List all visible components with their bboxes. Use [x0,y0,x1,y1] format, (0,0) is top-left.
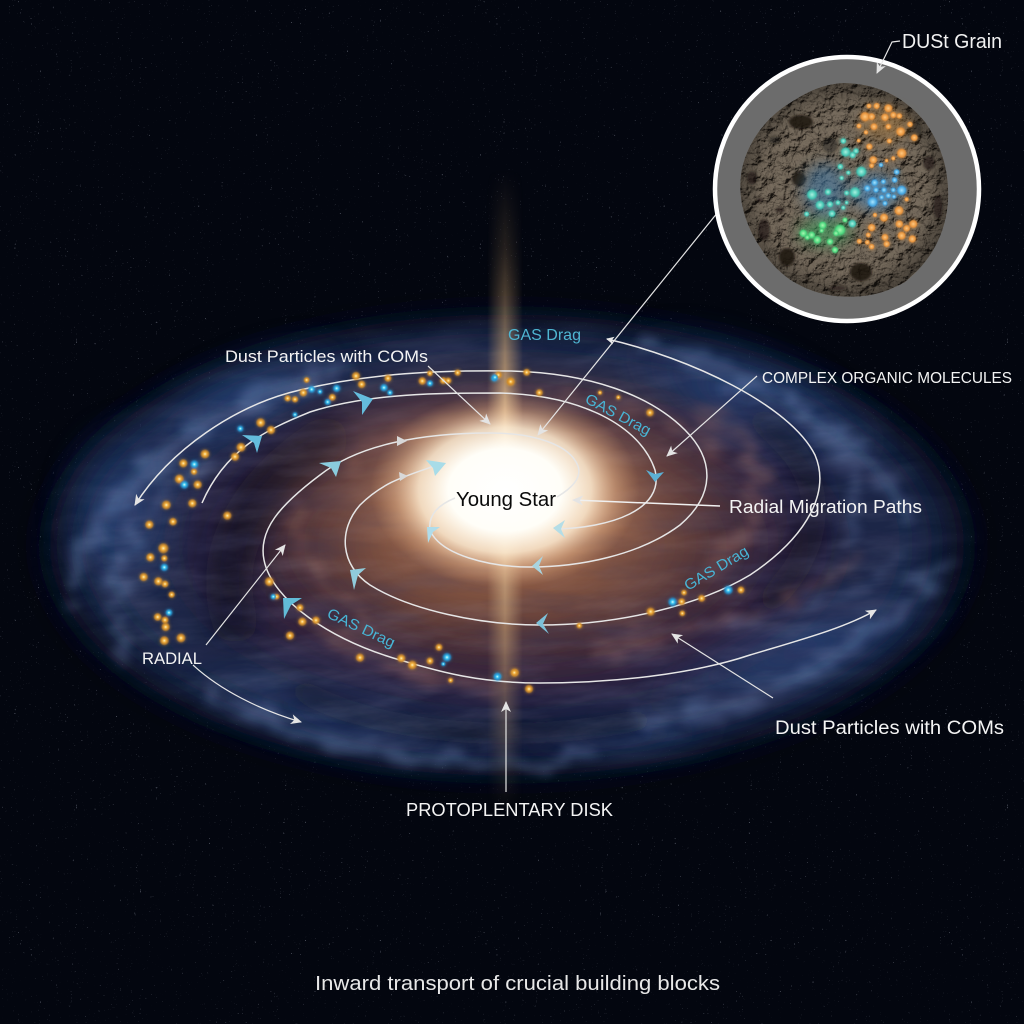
label: gas drag lower right: GAS Drag [681,543,752,594]
pointer arrow: radial [206,545,285,645]
young star core [370,392,640,588]
blue outer arm clouds [50,282,976,800]
craters [747,115,943,291]
pointer arrow: dust particles top [428,366,490,424]
pointer arrow: dust particles bottom [672,634,773,698]
spiral two [345,339,820,625]
label: protoplanetary disk: PROTOPLENTARY DISK [406,800,613,820]
label: radial migration paths: Radial Migration Paths [729,497,922,517]
orange upper cluster [856,103,918,168]
label: dust particles bottom: Dust Particles with COMs [775,718,1004,739]
label: complex organic molecules: COMPLEX ORGANIC MOLECULES [762,370,1012,387]
small flow heads [397,436,407,446]
pointer arrow: complex organic molecules [667,376,757,456]
vertical light jet [488,191,522,796]
caption: Inward transport of crucial building blocks [315,973,720,995]
blue particles [491,374,733,681]
orange particles [495,368,745,694]
orange particles [139,369,519,683]
pointer arrow: protoplanetary disk [505,702,507,792]
rocky dust grain [735,78,955,303]
white spiral migration paths [135,339,876,722]
green cluster [799,217,848,253]
label: dust grain: DUSt Grain [902,31,1002,53]
protoplanetary disk [34,302,980,790]
dust particles with COMs: left and top group [139,369,519,683]
label: gas drag upper right: GAS Drag [582,391,654,439]
stellar glow [240,345,770,645]
orange lower cluster [857,197,918,250]
cyan flow arrowheads [242,391,664,634]
inset: dust grain magnifier [715,57,979,321]
teal cluster [804,138,867,228]
molecule glow [799,109,909,246]
organic molecule clusters [799,103,918,253]
radial outer arc [193,665,301,722]
label: gas drag lower left: GAS Drag [324,605,398,651]
leader arrow: dust grain [877,41,900,73]
label: young star: Young Star [456,489,556,511]
label: radial: RADIAL [142,649,202,668]
pointer arrow: radial migration paths [573,500,720,506]
label: gas drag top: GAS Drag [508,327,581,344]
label: dust particles top: Dust Particles with COMs [225,347,428,366]
blue particles [160,375,502,681]
pointer arrow: dust grain to disk [538,212,718,435]
wispy disk texture [92,326,944,760]
blue cluster [864,163,907,207]
spiral four [202,393,656,529]
lens background and ring [715,57,979,321]
dark dust lanes [229,420,814,733]
spiral three [135,371,707,567]
dust particles with COMs: right group [491,368,745,694]
blue-grey arm wisps [70,345,945,762]
dusty pink arm streaks [298,395,860,690]
spiral one [263,433,876,683]
